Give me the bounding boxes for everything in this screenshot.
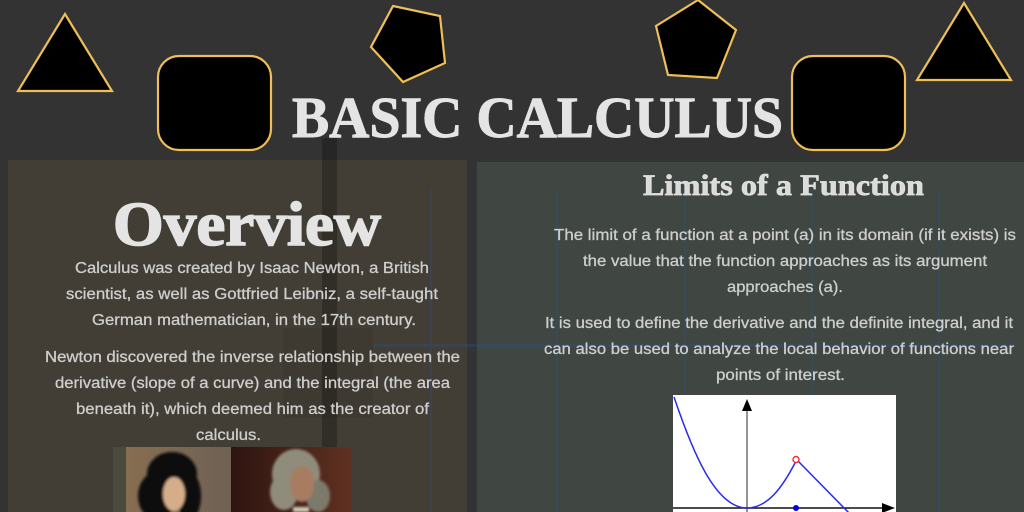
icon: pentagon left	[371, 6, 445, 82]
panel: overview	[8, 160, 467, 512]
text block: overview first paragraph: German mathematician, in the 17th century.	[92, 312, 416, 329]
text block: limits second paragraph	[544, 315, 1015, 384]
text block: limits first paragraph	[554, 227, 1016, 296]
icon: triangle left	[18, 14, 112, 91]
text block: limits second paragraph: points of interest.	[716, 367, 845, 384]
portraits: Leibniz and Newton	[113, 447, 351, 512]
title: BASIC CALCULUS	[292, 85, 783, 150]
heading: overview: Overview	[113, 191, 381, 259]
text block: overview second paragraph: derivative (slope of a curve) and the integral (the area	[55, 375, 450, 392]
text block: overview first paragraph	[66, 260, 439, 329]
text block: overview second paragraph: Newton discovered the inverse relationship between the	[45, 349, 460, 366]
icon: pentagon right	[656, 0, 736, 78]
text block: overview first paragraph: Calculus was created by Isaac Newton, a British	[75, 260, 429, 277]
icon: rounded square right	[792, 56, 905, 150]
heading: limits of a function: Limits of a Function	[643, 169, 924, 202]
panel: limits of a function	[477, 162, 1024, 512]
icon: rounded square left	[158, 56, 271, 150]
text block: overview second paragraph	[45, 349, 460, 444]
text block: limits first paragraph: the value that the function approaches as its argument	[583, 253, 988, 270]
chart: limit of a function graph	[673, 395, 896, 512]
text block: limits first paragraph: approaches (a).	[727, 279, 843, 296]
text block: overview second paragraph: beneath it), which deemed him as the creator of	[76, 401, 430, 418]
text block: limits first paragraph: The limit of a function at a point (a) in its domain (if it exists) is	[554, 227, 1016, 244]
text block: limits second paragraph: can also be used to analyze the local behavior of functions near	[544, 341, 1015, 358]
text block: overview first paragraph: scientist, as well as Gottfried Leibniz, a self-taught	[66, 286, 439, 303]
text block: limits second paragraph: It is used to define the derivative and the definite integral, and it	[545, 315, 1014, 332]
text block: overview second paragraph: calculus.	[196, 427, 261, 444]
icon: triangle right	[917, 3, 1011, 80]
